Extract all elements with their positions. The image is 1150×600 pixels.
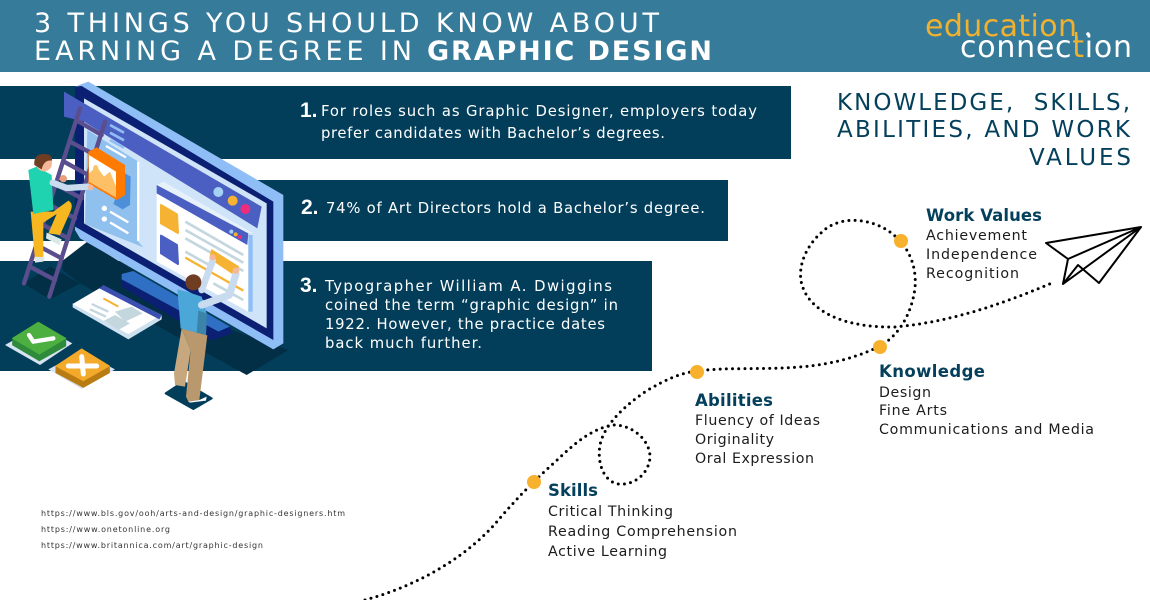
ladder shadow bbox=[23, 267, 80, 299]
label: abilities bbox=[695, 391, 820, 467]
label: knowledge: Knowledge bbox=[879, 362, 985, 381]
panel: fact 3: coined the term “graphic design” in bbox=[325, 297, 618, 314]
label: work values: Achievement bbox=[926, 228, 1027, 244]
panel: fact 3: Typographer William A. Dwiggins bbox=[324, 278, 612, 295]
label: knowledge: Design bbox=[879, 385, 931, 401]
label: knowledge: Communications and Media bbox=[879, 422, 1094, 438]
label: abilities: Fluency of Ideas bbox=[695, 413, 820, 429]
panel: fact 3: back much further. bbox=[325, 335, 482, 352]
logo: education connection: connection bbox=[960, 30, 1132, 65]
label: skills bbox=[548, 481, 737, 560]
ladder bbox=[24, 108, 105, 297]
panel: fact 3: 3. bbox=[300, 274, 318, 297]
panel: fact 3 bbox=[0, 261, 652, 371]
panel: fact 3: 1922. However, the practice dates bbox=[325, 316, 605, 333]
panel: fact 2 bbox=[0, 180, 728, 241]
logo: education connection: education bbox=[925, 9, 1077, 44]
label: knowledge bbox=[879, 362, 1094, 438]
source links: https://www.onetonline.org bbox=[41, 525, 170, 534]
path marker: work values bbox=[894, 234, 908, 248]
label: abilities: Abilities bbox=[695, 391, 773, 410]
title: EARNING A DEGREE IN bbox=[34, 36, 412, 67]
source links: https://www.britannica.com/art/graphic-design bbox=[41, 541, 263, 550]
person at screen bbox=[166, 250, 239, 409]
label: abilities: Oral Expression bbox=[695, 451, 814, 467]
monitor stand bbox=[122, 271, 232, 341]
heading: knowledge, skills, abilities, and work values: KNOWLEDGE, SKILLS, bbox=[837, 90, 1130, 116]
label: work values bbox=[926, 206, 1042, 282]
illustration: designers building a web page on a monitor bbox=[5, 82, 288, 409]
label: knowledge: Fine Arts bbox=[879, 403, 947, 419]
logo: education connection bbox=[925, 9, 1132, 65]
monitor bbox=[64, 82, 283, 349]
label: skills: Critical Thinking bbox=[548, 504, 673, 520]
title: GRAPHIC DESIGN bbox=[427, 36, 712, 67]
heading: knowledge, skills, abilities, and work values: VALUES bbox=[1029, 145, 1131, 171]
title bbox=[34, 8, 712, 67]
image card bbox=[88, 147, 125, 200]
source links: https://www.bls.gov/ooh/arts-and-design/graphic-designers.htm bbox=[41, 509, 345, 518]
heading: knowledge, skills, abilities, and work values bbox=[837, 90, 1131, 171]
paper airplane icon bbox=[1046, 227, 1141, 284]
title: 3 THINGS YOU SHOULD KNOW ABOUT bbox=[34, 8, 660, 39]
dotted flight path bbox=[365, 220, 1052, 600]
label: work values: Independence bbox=[926, 247, 1037, 263]
check button bbox=[5, 322, 72, 365]
document card bbox=[73, 285, 162, 339]
path marker: knowledge bbox=[873, 340, 887, 354]
label: skills: Reading Comprehension bbox=[548, 524, 737, 540]
label: work values: Work Values bbox=[926, 206, 1042, 225]
label: skills: Skills bbox=[548, 481, 598, 500]
panel: fact 1: prefer candidates with Bachelor’s degrees. bbox=[321, 125, 665, 142]
monitor shadow bbox=[63, 242, 288, 375]
path marker: abilities bbox=[690, 365, 704, 379]
panel: fact 2: 74% of Art Directors hold a Bachelor’s degree. bbox=[326, 200, 705, 217]
panel: fact 1 bbox=[0, 86, 791, 159]
source links bbox=[41, 509, 345, 550]
label: abilities: Originality bbox=[695, 432, 774, 448]
panel: fact 1: For roles such as Graphic Designer, employers today bbox=[321, 103, 757, 120]
label: work values: Recognition bbox=[926, 266, 1019, 282]
panel: fact 2: 2. bbox=[301, 196, 319, 219]
heading: knowledge, skills, abilities, and work values: ABILITIES, AND WORK bbox=[837, 117, 1131, 143]
person on ladder bbox=[28, 154, 94, 263]
label: skills: Active Learning bbox=[548, 544, 667, 560]
header band bbox=[0, 0, 1150, 72]
cross button bbox=[48, 349, 115, 389]
path marker: skills bbox=[527, 475, 541, 489]
panel: fact 1: 1. bbox=[300, 99, 318, 122]
